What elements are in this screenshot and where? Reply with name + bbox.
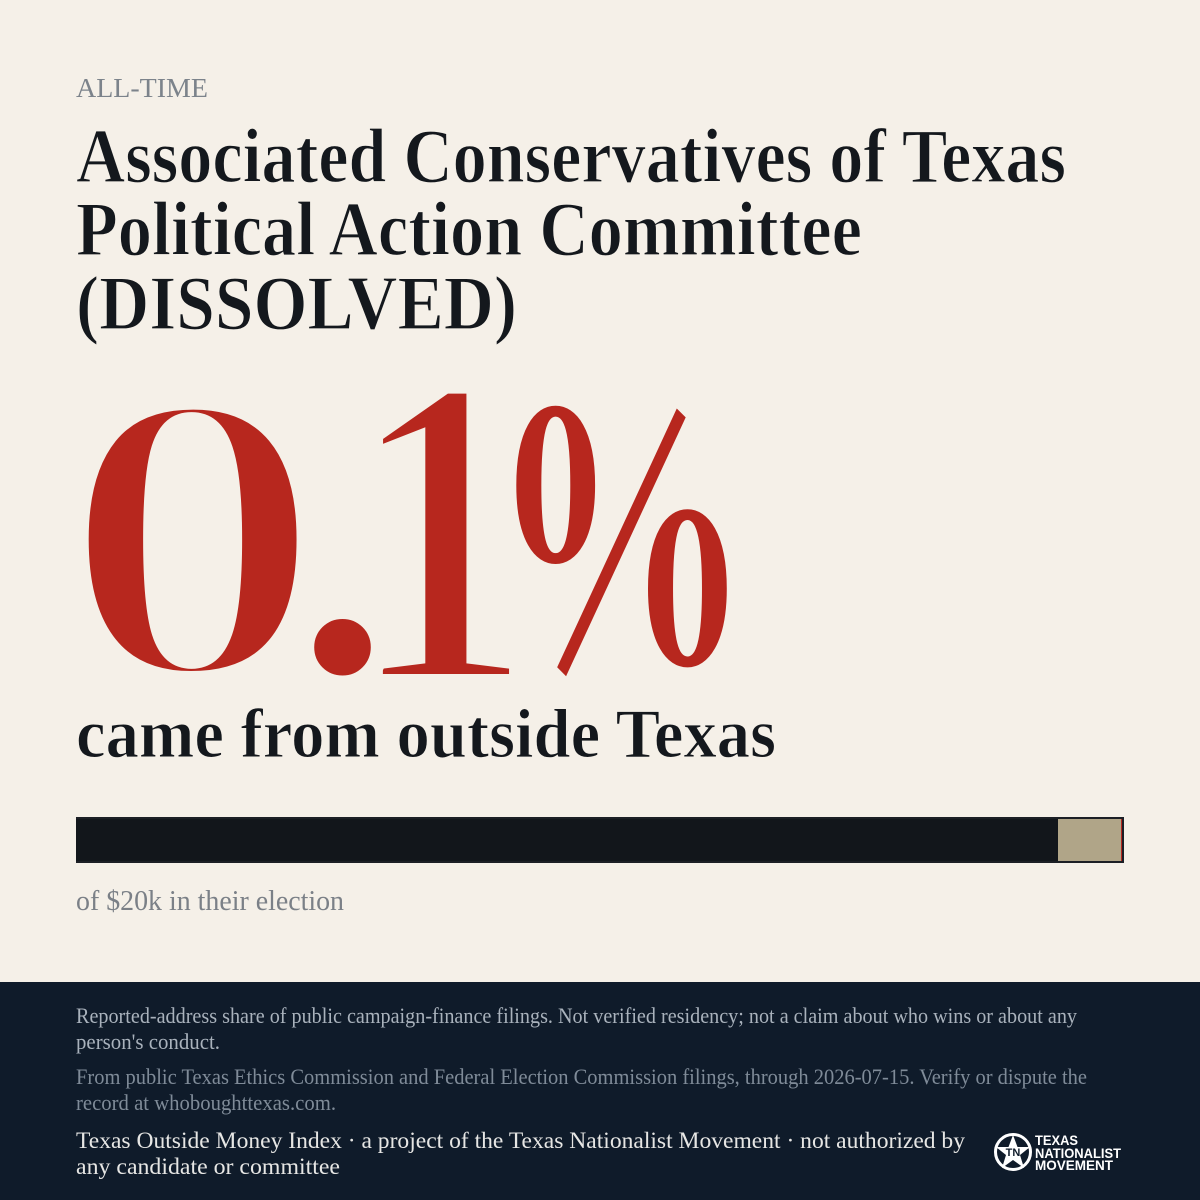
big percentage figure: %: [508, 274, 735, 760]
title: (DISSOLVED): [76, 260, 517, 346]
subheading: came from outside Texas: [76, 696, 776, 773]
attribution: any candidate or committee: [76, 1154, 340, 1179]
title: Political Action Committee: [76, 186, 862, 272]
big percentage figure: 0: [56, 307, 329, 766]
source note: record at whoboughttexas.com.: [76, 1090, 336, 1115]
eyebrow label: ALL-TIME: [76, 73, 208, 103]
icon: star in circle: TN: [1006, 1147, 1020, 1159]
title: [76, 113, 1066, 346]
methodology note: person's conduct.: [76, 1029, 220, 1054]
bar caption: of $20k in their election: [76, 885, 344, 917]
source note: From public Texas Ethics Commission and Federal Election Commission filings, through 2026-07-15. Verify or dispute the: [76, 1064, 1087, 1089]
footer band: [0, 982, 1200, 1200]
source note: [76, 1064, 1087, 1115]
logo wordmark: [1035, 1133, 1122, 1173]
attribution: Texas Outside Money Index · a project of the Texas Nationalist Movement · not authorized by: [76, 1128, 965, 1153]
title: Associated Conservatives of Texas: [76, 113, 1066, 199]
big percentage figure: .: [285, 268, 400, 778]
logo wordmark: MOVEMENT: [1035, 1158, 1114, 1173]
methodology note: Reported-address share of public campaign-finance filings. Not verified residency; not a claim about who wins or about any: [76, 1003, 1077, 1028]
methodology note: [76, 1003, 1077, 1054]
logo wordmark: TEXAS: [1035, 1133, 1078, 1148]
attribution: [76, 1128, 965, 1179]
big percentage figure: [56, 268, 735, 778]
logo wordmark: NATIONALIST: [1035, 1146, 1122, 1161]
big percentage figure: 1: [347, 285, 534, 778]
progress bar: [76, 817, 1124, 863]
logo: Texas Nationalist Movement: [996, 1133, 1122, 1173]
